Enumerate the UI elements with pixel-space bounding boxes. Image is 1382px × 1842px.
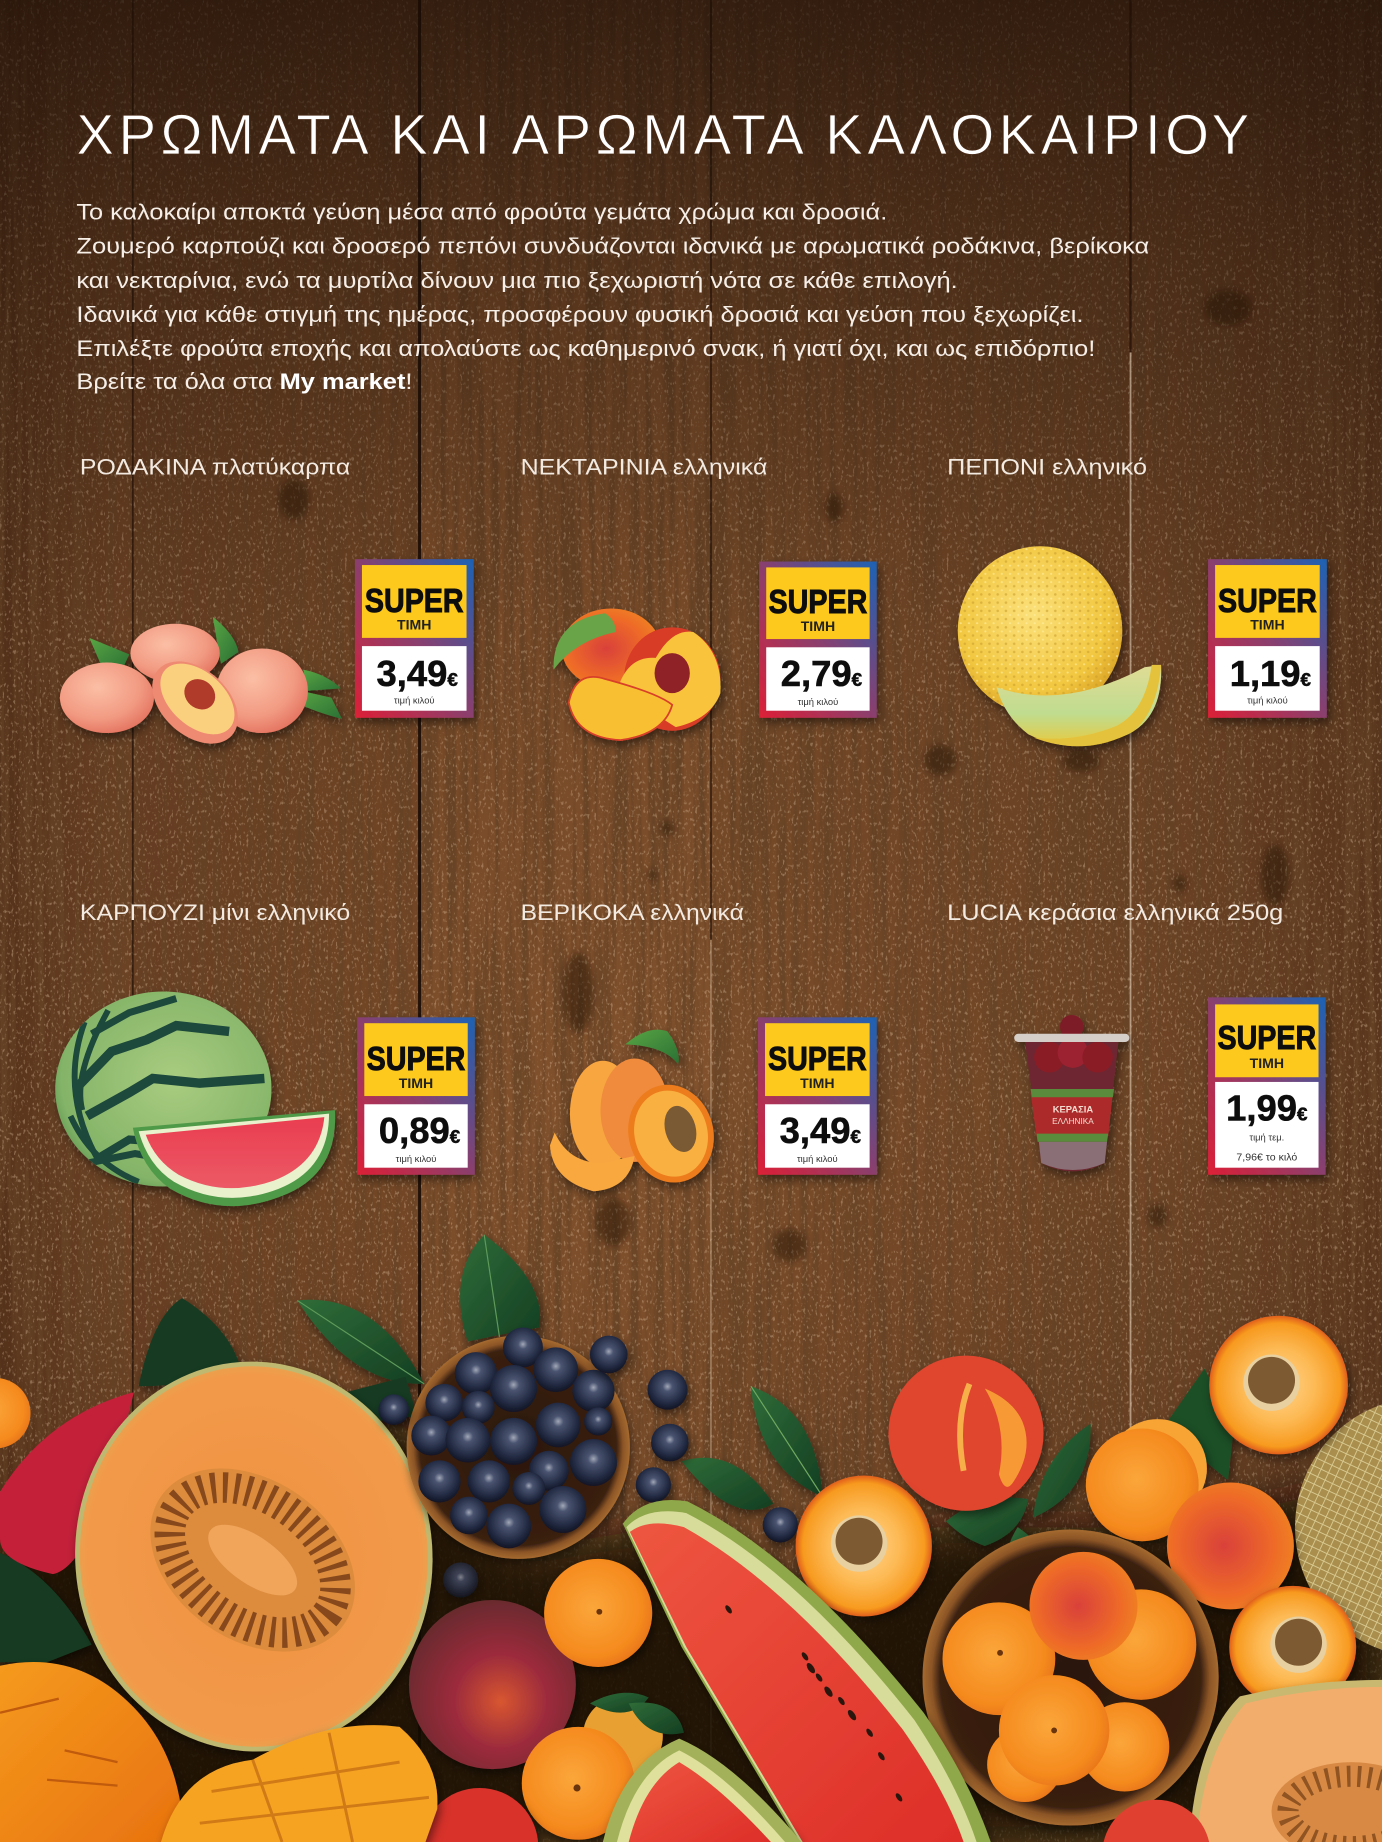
fruit: apricots and dark peach centre [409, 1559, 684, 1840]
price tag: watermelon 0,89: 0,89€ [379, 1110, 461, 1151]
price tag: nectarines 2,79: SUPER [769, 583, 868, 620]
fruit: whole apricots upper right [1086, 1419, 1294, 1609]
price tag: apricots 3,49: SUPER [768, 1040, 867, 1077]
price tag: cherries 1,99: 1,99€ [1226, 1088, 1308, 1129]
product photo: nectarines [553, 609, 721, 740]
fruit: cantaloupe half [62, 1350, 446, 1764]
price tag: melon 1,19 [1208, 559, 1327, 718]
product photo: cherry cup: ΚΕΡΑΣΙΑ [1053, 1103, 1093, 1114]
fruit: small watermelon wedge [603, 1739, 801, 1842]
fruit: halved apricots [796, 1316, 1356, 1708]
product photo: apricots [550, 1030, 725, 1192]
bottom fruit still life [0, 1235, 1382, 1842]
price tag: melon 1,19: ΤΙΜΗ [1250, 617, 1285, 633]
price tag: cherries 1,99 [1208, 997, 1326, 1175]
price tag: watermelon 0,89: SUPER [367, 1040, 466, 1077]
intro text block: Ιδανικά για κάθε στιγμή της ημέρας, προσφέρουν φυσική δροσιά και γεύση που ξεχωρίζει. [76, 302, 1084, 327]
price tag: watermelon 0,89: ΤΙΜΗ [399, 1075, 433, 1091]
product label: apricots: ΒΕΡΙΚΟΚΑ ελληνικά [521, 900, 744, 925]
melon on right edge [1295, 1398, 1382, 1656]
price tag: peaches 3,49: τιμή κιλού [394, 695, 435, 706]
product label: peaches: ΡΟΔΑΚΙΝΑ πλατύκαρπα [80, 455, 350, 480]
fruit: red apple bottom [421, 1788, 538, 1842]
dark shadow under fruit [0, 1421, 1382, 1842]
price tag: nectarines 2,79: 2,79€ [781, 653, 863, 694]
wooden bowl of apricots [923, 1530, 1219, 1826]
fruit: melon slice bottom right [1189, 1680, 1382, 1842]
price tag: melon 1,19: SUPER [1218, 582, 1317, 619]
intro text block: Ζουμερό καρπούζι και δροσερό πεπόνι συνδυάζονται ιδανικά με αρωματικά ροδάκινα, βερίκοκα [76, 234, 1149, 259]
fruit: red peach at bottom [1102, 1800, 1210, 1842]
fruit: red mango [0, 1392, 134, 1574]
price tag: watermelon 0,89: τιμή κιλού [396, 1153, 436, 1164]
price tag: melon 1,19: τιμή κιλού [1247, 695, 1288, 706]
price tag: peaches 3,49: SUPER [365, 582, 464, 619]
price tag: apricots 3,49: 3,49€ [780, 1110, 861, 1151]
price tag: apricots 3,49 [758, 1017, 877, 1175]
title: ΧΡΩΜΑΤΑ ΚΑΙ ΑΡΩΜΑΤΑ ΚΑΛΟΚΑΙΡΙΟΥ [76, 103, 1249, 166]
price tag: nectarines 2,79 [759, 562, 877, 718]
fruit: nectarine [888, 1356, 1044, 1511]
product photo: cherry cup [1014, 1015, 1129, 1171]
product photo: yellow melon [958, 546, 1161, 746]
product photo: flat peaches [60, 617, 342, 760]
price tag: cherries 1,99: τιμή τεμ. [1249, 1132, 1284, 1143]
price tag: apricots 3,49: τιμή κιλού [797, 1153, 838, 1164]
price tag: cherries 1,99: ΤΙΜΗ [1250, 1055, 1284, 1071]
fruit: left orange [0, 1378, 31, 1448]
leaves: upper left [139, 1235, 540, 1421]
product photo: cherry cup: ΕΛΛΗΝΙΚΑ [1052, 1117, 1094, 1126]
product label: melon: ΠΕΠΟΝΙ ελληνικό [947, 455, 1147, 480]
intro text block: Επιλέξτε φρούτα εποχής και απολαύστε ως καθημερινό σνακ, ή γιατί όχι, και ως επιδόρπιο! [76, 336, 1095, 361]
fruit: cubed mango [161, 1725, 437, 1842]
intro text block: Το καλοκαίρι αποκτά γεύση μέσα από φρούτα γεμάτα χρώμα και δροσιά. [76, 200, 887, 225]
intro text block: Βρείτε τα όλα στα My market ! [76, 369, 412, 394]
price tag: peaches 3,49: 3,49€ [377, 653, 458, 694]
product label: watermelon: ΚΑΡΠΟΥΖΙ μίνι ελληνικό [80, 900, 350, 925]
price tag: peaches 3,49 [355, 559, 474, 718]
product label: cherries: LUCIA κεράσια ελληνικά 250g [947, 900, 1283, 925]
fruit: mango left [0, 1662, 183, 1842]
price tag: cherries 1,99: 7,96€ το κιλό [1236, 1152, 1297, 1164]
price tag: cherries 1,99: SUPER [1217, 1019, 1316, 1056]
intro text block [76, 200, 1149, 394]
fruit: big watermelon wedge [623, 1500, 991, 1842]
price tag: melon 1,19: 1,19€ [1230, 653, 1312, 694]
product photo: mini watermelon [55, 991, 335, 1206]
product label: nectarines: ΝΕΚΤΑΡΙΝΙΑ ελληνικά [521, 455, 767, 480]
loose blueberries [378, 1336, 798, 1598]
leaves: centre and right [0, 1369, 1234, 1662]
price tag: peaches 3,49: ΤΙΜΗ [397, 617, 431, 633]
intro text block: και νεκταρίνια, ενώ τα μυρτίλα δίνουν μια πιο ξεχωριστή νότα σε κάθε επιλογή. [76, 268, 958, 293]
price tag: watermelon 0,89 [357, 1017, 475, 1175]
price tag: nectarines 2,79: ΤΙΜΗ [801, 618, 835, 634]
price tag: apricots 3,49: ΤΙΜΗ [800, 1075, 835, 1091]
bowl of blueberries [407, 1327, 630, 1559]
price tag: nectarines 2,79: τιμή κιλού [798, 696, 838, 707]
